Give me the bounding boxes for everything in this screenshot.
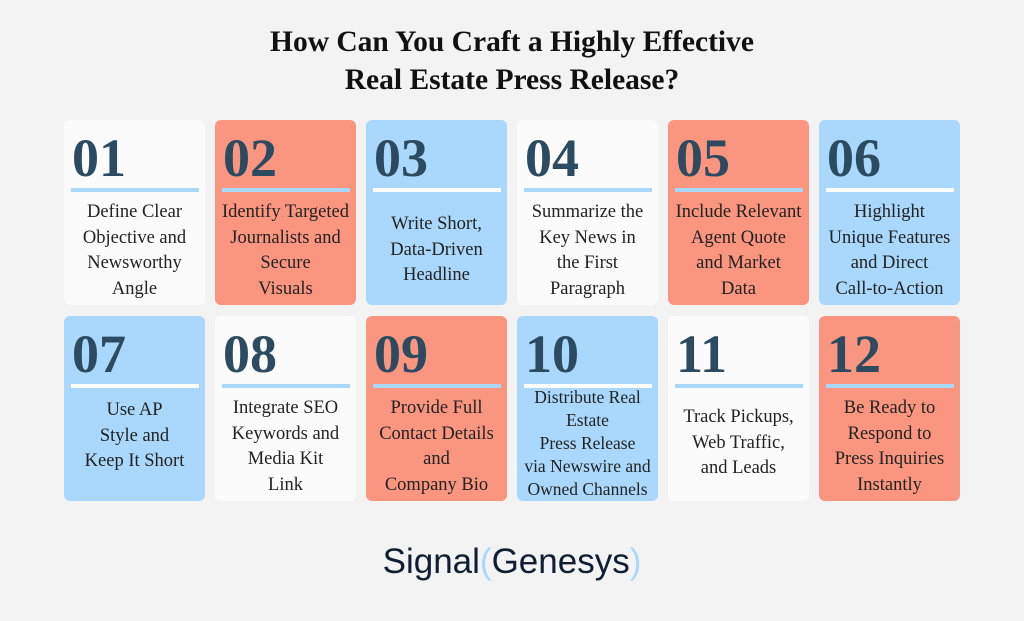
card 06: 06	[827, 128, 881, 188]
card 03: Headline	[403, 265, 470, 285]
card 04: Summarize the	[532, 202, 643, 222]
card 11	[668, 316, 809, 501]
card 11: 11	[676, 324, 727, 384]
card 01: Newsworthy	[87, 253, 182, 273]
card 04: 04	[525, 128, 579, 188]
card 10	[517, 316, 658, 501]
card 11: and Leads	[701, 458, 776, 478]
card 08: 08	[223, 324, 277, 384]
card 02: Visuals	[258, 278, 313, 298]
card 08: Keywords and	[232, 424, 339, 444]
card 01: Angle	[112, 278, 157, 298]
card 07	[64, 316, 205, 501]
card 10: Press Release	[540, 433, 635, 453]
card 08: Media Kit	[248, 449, 323, 469]
card 02	[215, 120, 356, 305]
card 05: Include Relevant	[676, 202, 801, 222]
card 12: Instantly	[857, 474, 922, 494]
card 10: 10	[525, 324, 579, 384]
card 02: Journalists and	[230, 228, 341, 248]
card 04: Paragraph	[550, 278, 625, 298]
card 05: and Market	[696, 253, 781, 273]
card 08: Integrate SEO	[233, 398, 338, 418]
card 09	[366, 316, 507, 501]
card 02: Secure	[260, 253, 311, 273]
card 06: Unique Features	[829, 228, 950, 248]
card 12	[819, 316, 960, 501]
card 01	[64, 120, 205, 305]
card 10: Estate	[566, 410, 609, 430]
card 06: Highlight	[854, 202, 925, 222]
card 01: Define Clear	[87, 202, 182, 222]
title: How Can You Craft a Highly Effective	[270, 26, 754, 58]
card 10: via Newswire and	[524, 456, 651, 476]
card 05: Data	[721, 278, 756, 298]
card 06: Call-to-Action	[836, 278, 943, 298]
title: Real Estate Press Release?	[345, 64, 679, 96]
card 05: 05	[676, 128, 730, 188]
card 10: Owned Channels	[527, 479, 648, 499]
card 12: Press Inquiries	[835, 449, 944, 469]
card 01: Objective and	[83, 228, 186, 248]
title	[270, 26, 754, 96]
card 07: Keep It Short	[85, 451, 184, 471]
card 12: Be Ready to	[844, 398, 935, 418]
card 02: 02	[223, 128, 277, 188]
card 06: and Direct	[851, 253, 928, 273]
card 01: 01	[72, 128, 126, 188]
card 11: Web Traffic,	[692, 432, 785, 452]
card 09: Contact Details	[379, 424, 494, 444]
card 02: Identify Targeted	[222, 202, 349, 222]
card 03: 03	[374, 128, 428, 188]
card 07: Use AP	[106, 400, 163, 420]
card 12: Respond to	[848, 424, 931, 444]
card 09: and	[423, 449, 450, 469]
card 03: Write Short,	[391, 214, 482, 234]
card 03: Data-Driven	[390, 240, 483, 260]
card 07: 07	[72, 324, 126, 384]
card 03	[366, 120, 507, 305]
card 05: Agent Quote	[691, 228, 786, 248]
card 12: 12	[827, 324, 881, 384]
card 08	[215, 316, 356, 501]
card 06	[819, 120, 960, 305]
card 10: Distribute Real	[534, 387, 641, 407]
card 09: 09	[374, 324, 428, 384]
card 09: Company Bio	[385, 474, 488, 494]
card 04: the First	[557, 253, 618, 273]
card 08: Link	[268, 474, 303, 494]
card 04	[517, 120, 658, 305]
card 09: Provide Full	[390, 398, 482, 418]
card 04: Key News in	[539, 228, 636, 248]
logo: Signal(Genesys)	[383, 542, 641, 581]
card 05	[668, 120, 809, 305]
card 07: Style and	[100, 426, 169, 446]
card 11: Track Pickups,	[683, 407, 794, 427]
